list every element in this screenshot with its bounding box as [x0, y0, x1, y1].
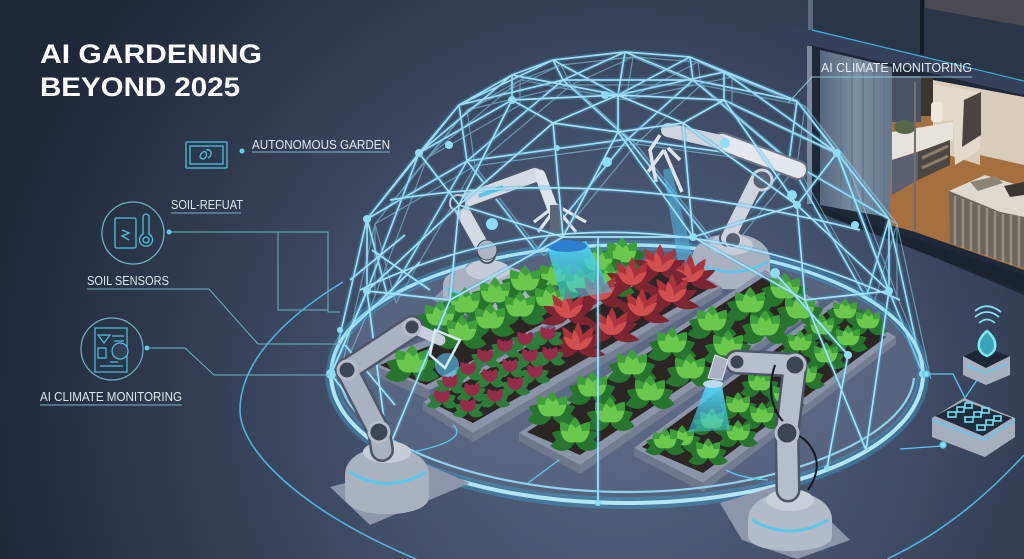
device: control panel — [932, 398, 1015, 457]
connector: soil sensor — [166, 230, 340, 312]
blue water spray, back left robot — [547, 240, 612, 300]
device connectors — [900, 371, 977, 449]
geodesic dome front mesh — [331, 95, 900, 503]
dome floor — [335, 248, 919, 500]
plants: red and mixed row, bed 2 — [426, 244, 718, 419]
planter bed 3 — [519, 270, 819, 474]
dome base ring front — [331, 374, 923, 503]
callout: top right climate monitoring: AI CLIMATE MONITORING — [821, 60, 972, 75]
water spray over bed 4 — [688, 386, 730, 432]
control panel — [962, 92, 981, 147]
planter bed 1 — [366, 258, 660, 400]
robot arm: back right — [648, 130, 798, 289]
water stream — [663, 168, 694, 262]
callout: top right climate monitoring — [788, 60, 972, 103]
callout: autonomous garden: AUTONOMOUS GARDEN — [252, 137, 390, 152]
connector: climate — [144, 346, 330, 375]
robot arm: back left — [432, 175, 586, 322]
wifi arcs — [975, 306, 1001, 323]
curtain — [820, 50, 892, 218]
geodesic dome back mesh — [331, 52, 931, 379]
AI sensor icon — [979, 331, 995, 356]
planter bed 4 — [634, 300, 896, 492]
plants: green row, bed 4 — [644, 298, 889, 467]
building with kitchen interior — [770, 0, 1024, 295]
callout: soil-refuat: SOIL-REFUAT — [171, 197, 243, 212]
plants: green row, bed 1 — [384, 237, 648, 384]
icon: soil sensor tablet and thermometer — [102, 202, 164, 264]
plant bowl — [894, 120, 916, 134]
nozzle — [708, 355, 728, 380]
title: AI GARDENING — [40, 39, 262, 69]
window ledge — [770, 30, 1024, 99]
robot arm: front right — [703, 354, 850, 559]
gripper — [430, 330, 460, 368]
callout: soil sensors — [87, 273, 340, 344]
lower sill — [810, 205, 1024, 292]
floor circuit ring — [240, 282, 1024, 559]
wall under ledge — [810, 45, 1024, 295]
spark at left gripper — [435, 353, 459, 377]
counter — [892, 122, 953, 160]
island — [949, 175, 1024, 217]
robot arm: front left — [330, 319, 470, 525]
planter bed 2 — [423, 258, 722, 442]
kettle — [931, 102, 942, 122]
kitchen room — [890, 76, 1024, 270]
plants: green row, bed 3 — [526, 273, 826, 453]
platform — [432, 262, 540, 322]
icon: ai climate report — [81, 318, 143, 380]
device: wireless hub — [963, 306, 1010, 385]
gripper — [648, 135, 682, 192]
icon: tablet — [186, 142, 227, 168]
title: BEYOND 2025 — [40, 72, 240, 102]
callout: soil sensors: SOIL SENSORS — [87, 273, 169, 288]
callout: ai climate monitoring: AI CLIMATE MONITORING — [40, 389, 182, 404]
dome base ring back — [331, 245, 923, 374]
title — [40, 39, 262, 102]
cable connectors — [413, 425, 768, 483]
dome mesh nodes — [326, 91, 927, 506]
gripper — [534, 205, 586, 232]
upper windows — [808, 0, 1024, 82]
